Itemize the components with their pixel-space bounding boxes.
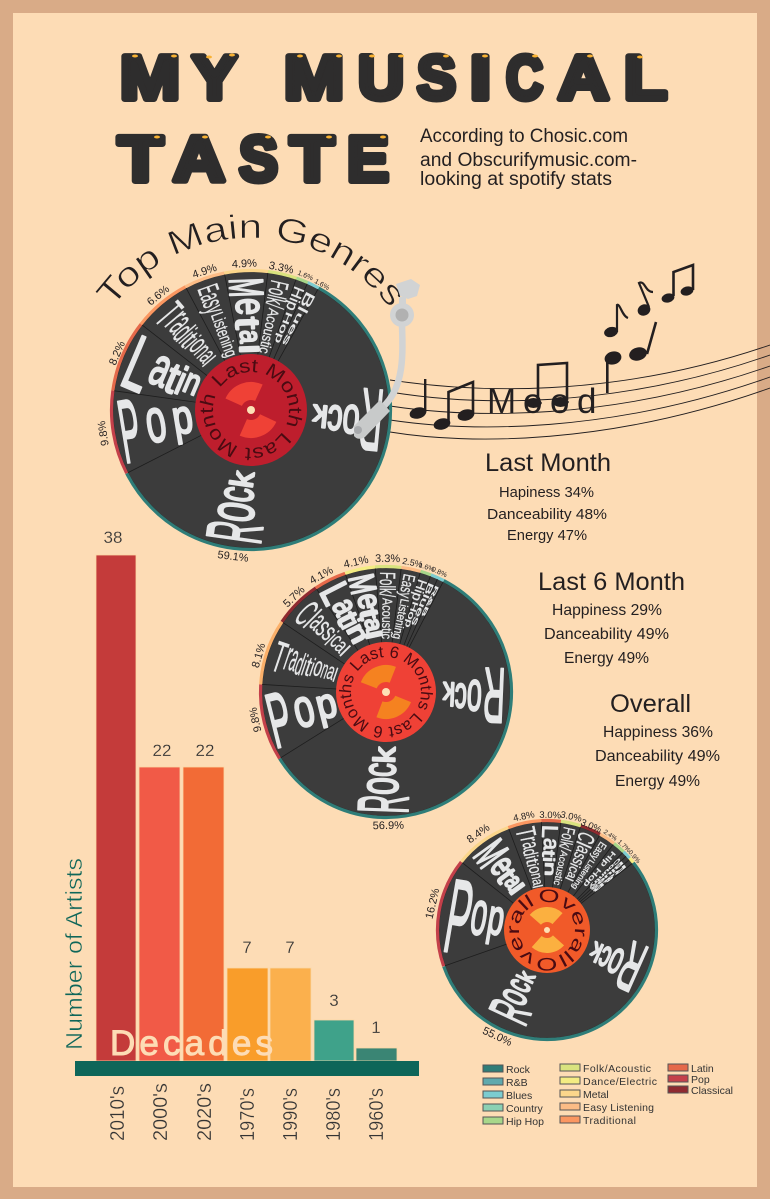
bar values: 22 [196,741,214,760]
wedge labels: Easy [395,572,419,600]
wedge labels: L [537,825,563,838]
wedge labels: C [571,828,600,848]
wedge labels: l [360,629,386,641]
wedge labels: d [518,847,541,858]
wedge labels: a [539,838,564,851]
wedge labels: c [324,628,349,652]
wedge labels: r [515,834,545,845]
x axis band [75,1061,419,1076]
percent labels: 3.3% [268,260,295,277]
wedge labels: Folk/ [260,278,295,311]
wedge labels: a [499,868,529,894]
wedge labels: L [311,576,358,612]
wedge labels [111,277,387,548]
wedge labels: a [194,343,222,368]
percent labels: 8.4% [465,822,492,846]
wedge labels: t [490,863,522,889]
wedge labels: a [161,305,203,341]
title [118,44,667,195]
legend: R&B [506,1077,528,1089]
wedge labels: l [571,838,596,851]
wedge labels: R&B [591,863,628,895]
wedge labels: C [286,594,326,633]
year labels: 2020's [194,1083,216,1141]
mood stats: overall [595,690,720,790]
wedge labels: i [172,323,203,350]
bar values: 3 [329,991,339,1010]
wedge labels: k [369,745,402,764]
wedge labels: i [178,331,206,355]
bar values: 7 [242,938,252,957]
wedge labels: M [218,277,272,298]
percent labels: 16.2% [424,887,442,920]
wedge labels: n [188,337,218,364]
bar: 2020s [183,767,224,1061]
percent labels: 4.1% [343,554,370,571]
wedge labels: P [258,674,301,765]
wedge labels: r [156,298,199,337]
title: S [239,123,278,195]
legend: Folk/Acoustic [583,1063,651,1075]
bar: 1960s [356,1048,397,1061]
wedge labels: a [517,839,544,852]
wedge labels: Acoustic [255,307,282,356]
wedge labels: Listening [570,858,596,891]
wedge labels: Hop [403,600,420,630]
wedge labels: d [166,315,202,348]
wedge labels: l [330,665,340,687]
wedge labels: o [525,864,546,875]
wedge labels: i [336,615,366,633]
bar values: 1 [371,1018,381,1037]
wedge labels: s [568,855,588,868]
record: overall: OverallOverall [509,890,584,971]
label: last 6 months [336,642,436,742]
legend: Pop [691,1074,710,1086]
wedge labels: o [193,496,269,526]
wedge labels: o [287,677,320,740]
wedge labels: c [325,395,345,448]
wedge labels: Country [588,857,622,890]
percent labels: 2.4% [602,829,618,843]
wedge labels: R [481,651,507,740]
legend: Classical [691,1085,733,1097]
legend: Dance/Electric [583,1076,657,1088]
percent labels: 9.8% [96,420,112,447]
wedge labels: a [359,616,388,634]
bar values: 7 [285,938,295,957]
wedge labels: o [487,980,537,1012]
wedge labels: R [355,369,387,470]
wedge labels: k [223,468,261,490]
wedge labels: P [437,858,480,977]
percent labels: 4.9% [191,262,219,281]
mood stats: last month [485,449,611,544]
wedge labels: k [310,398,329,432]
wedge labels: t [330,607,364,630]
wedge labels: T [146,293,193,335]
title: C [506,44,543,113]
year labels: 1970's [237,1088,259,1141]
wedge labels: c [497,972,538,998]
subtitle: According to Chosic.com [420,126,628,147]
bar values: 22 [153,741,171,760]
year labels: 2000's [150,1083,172,1141]
wedge labels: i [306,653,319,682]
subtitle [420,126,637,190]
wedge labels: i [521,854,542,861]
wedge labels: Hip [282,284,307,313]
wedge labels: e [482,848,523,883]
wedge labels: t [174,326,205,353]
percent labels: 1.6% [296,270,314,282]
wedge labels: Blues [409,581,435,627]
wedge labels: L [111,318,168,409]
wedge labels: t [228,316,266,330]
wedge labels: s [570,849,591,863]
wedge labels: Listening [390,598,412,640]
wedge labels: M [463,831,517,877]
wedge labels: o [598,938,631,991]
wedge labels: i [566,860,583,870]
year labels [107,1083,388,1141]
bar: 1970s [227,968,268,1061]
title: T [118,123,163,195]
mood stats: last 6 month: Danceability 49% [544,626,669,643]
wedge labels: n [178,360,208,403]
wedge labels: s [309,613,338,642]
wedge labels: Hip Hop [582,849,616,888]
percent labels: 5.7% [281,584,308,610]
wedge labels [437,824,656,1033]
mood stats: last month: Hapiness 34% [499,484,594,501]
wedge labels: M [341,570,385,598]
legend: Latin [691,1063,714,1075]
record: last 6 months [247,553,514,832]
bar: 1990s [270,968,311,1061]
mood heading on staff with notes: Mood [487,382,596,421]
wedge labels: P [112,381,148,483]
mood stats: last 6 month: Happiness 29% [552,602,662,619]
percent labels: 3.0% [559,809,583,825]
x axis title: Decades [110,1024,273,1063]
percent labels: 0.9% [626,849,642,865]
percent labels [96,258,330,565]
wedge labels: c [591,938,617,980]
percent labels: 4.9% [232,258,257,271]
wedge labels: t [522,857,543,866]
year labels: 1980's [323,1088,345,1141]
wedge labels: a [303,605,334,636]
percent labels: 0.8% [430,566,448,579]
percent labels: 4.1% [308,564,336,587]
percent labels: 56.9% [373,820,404,832]
percent labels: 9.8% [247,706,264,733]
wedge labels: R [477,990,544,1033]
wedge labels: i [169,360,193,403]
label: overall [504,887,590,973]
percent labels: 3.0% [539,810,562,821]
wedge labels: Listening [207,310,241,360]
title: L [624,44,667,113]
wedge labels: i [539,857,557,862]
wedge labels: a [141,337,182,399]
percent labels: 1.7% [616,839,632,854]
wedge labels: k [585,936,607,968]
legend: Rock [506,1064,531,1076]
wedge labels: a [233,329,267,344]
title: U [358,44,404,113]
wedge labels: Easy [191,280,231,318]
title: S [417,44,456,113]
bar values [104,528,381,1037]
percent labels: 8.2% [107,339,128,367]
title: E [347,123,389,195]
wedge labels: o [466,879,493,949]
wedge labels: i [298,650,311,682]
year labels: 1960's [366,1088,388,1141]
legend [483,1063,733,1128]
record: last month: Last Month Last Month [200,360,302,460]
wedge labels: t [539,850,559,857]
title: M [284,44,344,113]
wedge labels: d [291,646,309,682]
wedge labels: o [310,651,327,683]
subtitle: and Obscurifymusic.com- [420,150,637,171]
percent labels: 2.5% [401,556,424,570]
legend: Easy Listening [583,1102,654,1114]
wedge labels: l [530,883,546,890]
mood stats: last month: Energy 47% [507,527,587,544]
wedge labels: a [564,870,580,882]
bar: 1980s [314,1020,354,1061]
percent labels: 59.1% [217,549,249,565]
wedge labels: a [284,638,305,680]
wedge labels: l [562,875,576,883]
wedge labels: Bl [295,289,319,316]
legend: Hip Hop [506,1116,544,1128]
year labels: 2010's [107,1086,129,1141]
wedge labels: l [197,352,219,372]
music staff [390,345,770,439]
mood stats: last month: Last Month [485,449,611,477]
percent labels: 55.0% [480,1025,514,1049]
wedge labels [258,570,507,814]
wedge labels: n [341,618,376,648]
wedge labels: T [266,633,293,683]
wedge labels: s [316,618,344,646]
wedge labels: k [512,967,541,987]
mood stats: overall: Energy 49% [615,773,700,790]
wedge labels: o [340,393,362,452]
bar chart: decades [61,528,419,1141]
tonearm [354,279,420,439]
wedge labels: a [330,634,354,658]
wedge labels: i [320,626,344,650]
percent labels: 8.1% [250,642,268,669]
wedge labels: Easy [587,839,608,863]
percent labels: 1.6% [313,278,330,292]
wedge labels: c [353,762,407,778]
wedge labels: Blues [590,860,625,892]
bar: 2000s [139,767,180,1061]
wedge labels: Folk/ [555,825,579,852]
wedge labels: c [454,674,468,723]
wedge labels: c [566,864,583,876]
wedge labels: R [189,516,280,548]
wedge labels: n [317,654,333,685]
record: last 6 months: Last 6 Months Last 6 Months [339,646,433,738]
wedge labels: r [279,633,299,679]
mood stats: last 6 month: Energy 49% [564,650,649,667]
year labels: 1990's [280,1088,302,1141]
percent labels [247,553,448,832]
wedge labels: Hop [273,311,294,345]
wedge labels: n [541,862,558,876]
title: A [558,44,609,113]
mood heading on staff with notes [408,265,694,432]
wedge labels: e [351,590,389,612]
wedge labels: l [234,345,264,354]
mood stats: last 6 month: Last 6 Month [538,568,685,596]
wedge labels: a [323,658,339,686]
wedge labels: ues [280,311,305,347]
wedge labels: a [325,592,365,621]
wedge labels: R [606,927,656,1006]
wedge labels: c [205,483,266,506]
wedge labels: o [140,386,171,457]
wedge labels: Acoustic [379,598,396,639]
mood stats: last month: Danceability 48% [487,506,607,523]
title: M [120,44,180,113]
percent labels: 1.6% [418,562,435,574]
y axis title: Number of Artists [61,858,87,1050]
title: T [290,123,334,195]
mood stats: overall: Danceability 49% [595,748,720,765]
legend: Country [506,1103,544,1115]
wedge labels: R [344,794,424,814]
title: I [470,44,491,113]
wedge labels: a [571,843,594,858]
wedge labels: p [168,390,197,446]
wedge labels: t [301,651,316,682]
wedge labels: o [465,668,483,732]
bar values: 38 [104,528,122,547]
record: last month [96,258,392,565]
percent labels: 4.8% [512,809,536,824]
wedge labels: e [227,297,275,316]
wedge labels: o [183,329,215,359]
wedge labels: Folk/ [375,572,400,598]
mood stats: overall: Happiness 36% [603,724,713,741]
wedge labels: p [484,888,509,946]
title: A [173,123,225,195]
mood stats: last 6 month [538,568,685,667]
wedge labels: t [354,606,385,623]
subtitle: looking at spotify stats [420,169,612,190]
record: overall [424,809,658,1049]
label: last month [195,354,307,466]
wedge labels: Hip [409,578,430,603]
wedge labels: t [158,354,187,403]
percent labels [424,809,642,1049]
percent labels: 3.3% [375,553,400,565]
percent labels: 3.0% [579,817,604,836]
wedge labels: n [527,871,545,881]
wedge labels: Acoustic [551,850,569,886]
wedge labels: a [528,877,546,887]
wedge labels: i [523,862,540,868]
wedge labels: k [441,675,456,712]
percent labels: 6.6% [145,283,172,308]
wedge labels: T [510,824,542,840]
legend: Metal [583,1089,609,1101]
title: Y [192,44,237,113]
wedge labels: l [335,643,353,661]
wedge labels: p [311,678,341,729]
wedge labels: l [296,603,328,635]
legend: Traditional [583,1115,636,1127]
bar: 2010s [96,555,136,1061]
wedge labels: l [505,879,528,899]
wedge labels: R&B [418,584,440,619]
mood stats: overall: Overall [610,690,691,718]
curved heading: top main genres: Top Main Genres [96,214,400,305]
legend: Blues [506,1090,532,1102]
wedge labels: o [346,776,410,796]
